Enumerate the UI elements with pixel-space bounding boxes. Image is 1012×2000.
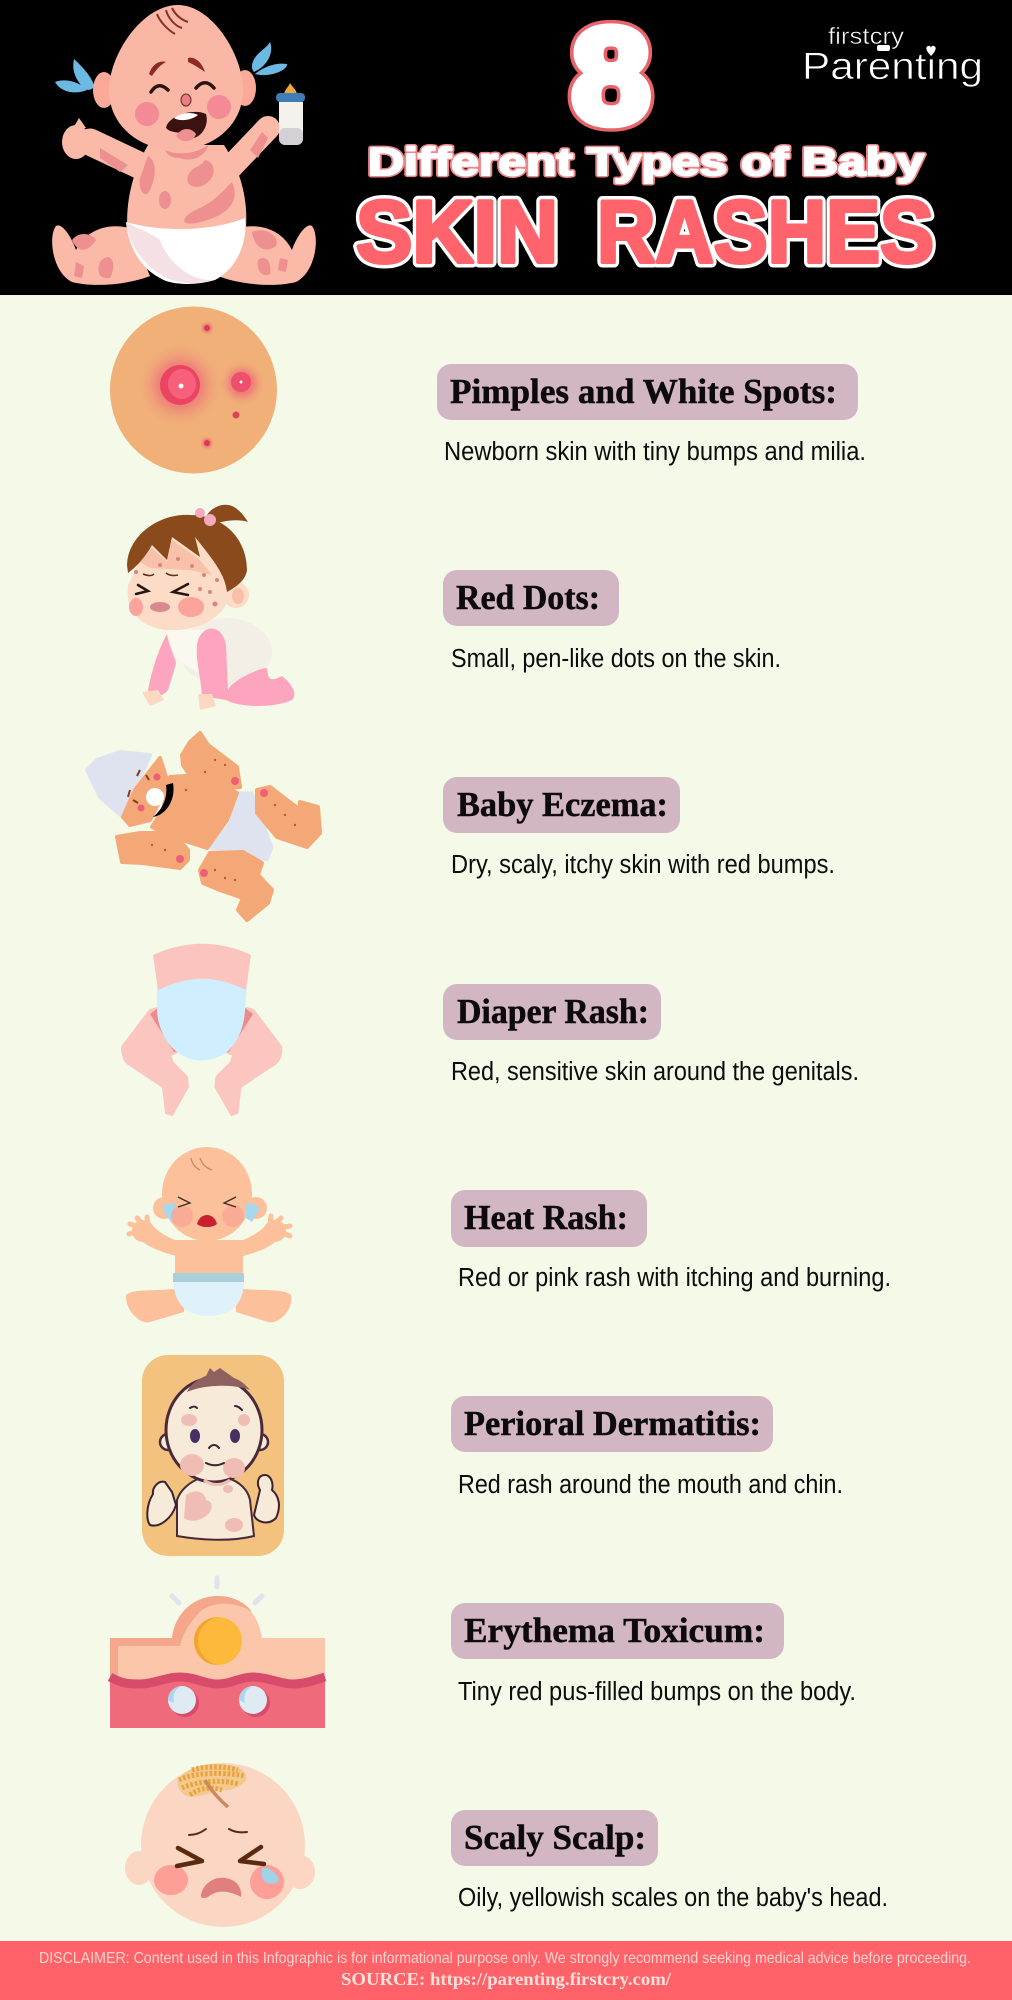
title: 8: 8 <box>572 2 650 151</box>
heading pill: Baby Eczema: <box>457 785 668 824</box>
icon: diaper area with rash <box>122 944 281 1115</box>
panel: Diaper Rash <box>122 944 859 1115</box>
panel: Perioral Dermatitis <box>142 1355 843 1556</box>
heading pill: Pimples and White Spots: <box>450 372 837 411</box>
title: Different Types of Baby: Different Types of Baby <box>368 141 924 184</box>
header band <box>0 0 1012 295</box>
heading pill: Diaper Rash: <box>457 992 649 1031</box>
panel: Heat Rash <box>126 1147 891 1322</box>
icon: baby head with scaly scalp <box>125 1763 315 1927</box>
icon: crying baby with rash and bottle <box>52 5 316 285</box>
title: Different Types of Baby: Different Types of Baby <box>368 141 924 184</box>
description: Dry, scaly, itchy skin with red bumps. <box>451 851 835 879</box>
description: Red or pink rash with itching and burning. <box>458 1264 891 1292</box>
source text: SOURCE: https://parenting.firstcry.com/ <box>341 1969 672 1989</box>
icon: baby bottle <box>276 83 305 145</box>
heading pill <box>443 777 680 833</box>
heading pill <box>437 364 858 420</box>
description: Red rash around the mouth and chin. <box>458 1471 843 1499</box>
heading pill <box>451 1603 784 1659</box>
description: Tiny red pus-filled bumps on the body. <box>458 1678 856 1706</box>
icon: baby lying with eczema <box>87 733 320 920</box>
panel: Pimples and White Spots <box>110 306 866 474</box>
heading pill <box>451 1190 647 1247</box>
icon: crying baby with heat rash <box>126 1147 291 1322</box>
heading pill <box>451 1810 658 1866</box>
icon: crawling baby with red dots <box>127 505 294 710</box>
description: Oily, yellowish scales on the baby's head. <box>458 1884 888 1912</box>
logo: firstcry parenting <box>802 23 983 88</box>
title: SKIN RASHES: SKIN <box>356 182 558 281</box>
footer band <box>0 1941 1012 2000</box>
icon: baby portrait with perioral rash <box>142 1355 284 1556</box>
logo: firstcry parenting: Parenting <box>802 46 983 88</box>
description: Red, sensitive skin around the genitals. <box>451 1058 859 1086</box>
description: Small, pen-like dots on the skin. <box>451 645 781 673</box>
panel: Scaly Scalp <box>125 1763 888 1927</box>
heading pill: Heat Rash: <box>464 1198 628 1237</box>
heading pill <box>443 984 661 1040</box>
icon: skin with pimples <box>110 306 277 474</box>
description: Newborn skin with tiny bumps and milia. <box>444 438 866 466</box>
panel: Baby Eczema <box>87 733 835 920</box>
heading pill <box>443 570 619 626</box>
heading pill: Scaly Scalp: <box>464 1818 646 1857</box>
panel: Red Dots <box>127 505 781 710</box>
icon: skin cross-section with pus bump <box>110 1578 325 1728</box>
heading pill: Red Dots: <box>456 578 600 617</box>
logo: firstcry parenting: firstcry <box>828 23 905 49</box>
title: SKIN RASHES <box>356 182 934 281</box>
heading pill <box>451 1396 773 1452</box>
title: SKIN RASHES: RASHES <box>597 182 934 281</box>
panel: Erythema Toxicum <box>110 1578 856 1728</box>
heading pill: Erythema Toxicum: <box>464 1611 765 1650</box>
title: SKIN RASHES: SKIN <box>356 182 558 281</box>
heading pill: Perioral Dermatitis: <box>464 1404 761 1443</box>
title: SKIN RASHES: RASHES <box>597 182 934 281</box>
title: 8: 8 <box>572 2 650 151</box>
